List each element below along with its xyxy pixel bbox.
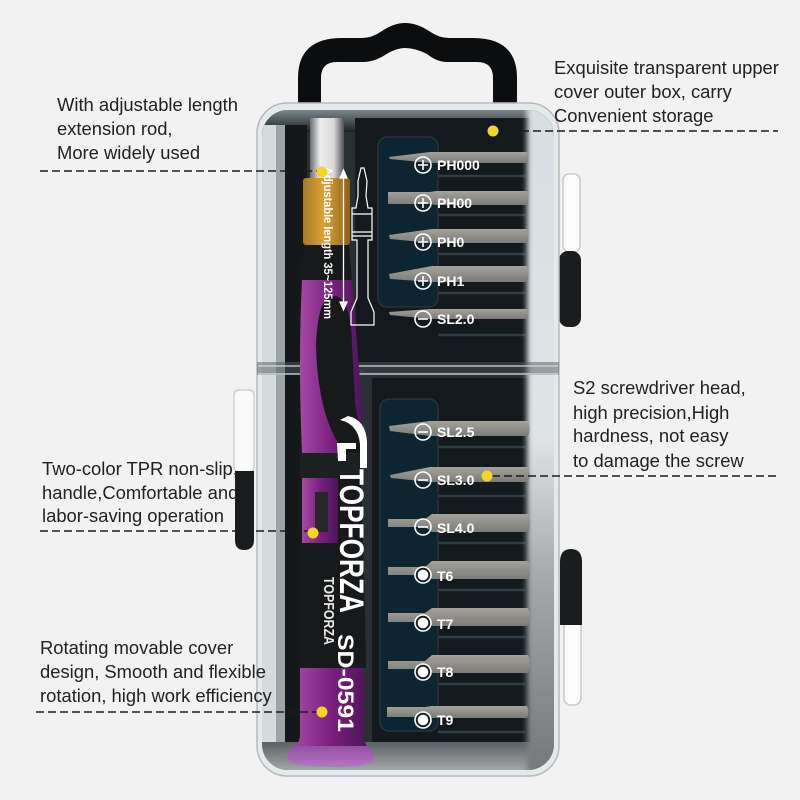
panel: screwdriver bits lower xyxy=(387,421,530,718)
callout: adjustable length: With adjustable length xyxy=(57,94,238,115)
bit labels: T7 xyxy=(437,616,454,632)
callout: S2 head xyxy=(482,377,778,482)
callout: adjustable length: extension rod, xyxy=(57,118,173,139)
bit labels: PH00 xyxy=(437,195,472,211)
callout: S2 head: hardness, not easy xyxy=(573,425,729,446)
icon: box carry handle xyxy=(298,23,517,106)
bit labels: PH1 xyxy=(437,273,464,289)
bit labels: T8 xyxy=(437,664,454,680)
callout: TPR handle: Two-color TPR non-slip, xyxy=(42,458,238,479)
bit labels: T6 xyxy=(437,568,454,584)
callout: rotating cover: Rotating movable cover xyxy=(40,637,233,658)
icon: mini screwdriver outline xyxy=(351,168,374,325)
icon: right lower clip xyxy=(560,549,582,705)
callout: rotating cover: design, Smooth and flexible xyxy=(40,661,266,682)
brand logo: TOPFORZA xyxy=(332,469,369,613)
tray lower xyxy=(372,378,530,742)
bit pocket lower xyxy=(380,399,438,731)
left glare of case xyxy=(262,125,276,765)
gold knurled sleeve xyxy=(303,178,350,245)
callout: S2 head: to damage the screw xyxy=(573,450,744,471)
callout: transparent cover: Exquisite transparent upper xyxy=(554,57,779,78)
tray upper xyxy=(355,118,530,372)
model number: SD-0591 xyxy=(333,634,358,732)
bit labels: SL2.5 xyxy=(437,424,475,440)
case bottom reflection xyxy=(262,742,554,770)
brand logo small: TOPFORZA xyxy=(321,577,337,645)
purple middle xyxy=(302,478,338,543)
callout: S2 head: high precision,High xyxy=(573,402,729,423)
bit labels: SL3.0 xyxy=(437,472,475,488)
brand logo swoosh xyxy=(337,416,367,468)
case top reflection xyxy=(262,110,554,132)
callout: adjustable length: More widely used xyxy=(57,142,200,163)
bit labels: SL4.0 xyxy=(437,520,475,536)
callout: rotating cover: rotation, high work efficiency xyxy=(40,685,273,706)
bit labels: SL2.0 xyxy=(437,311,475,327)
panel: transparent case xyxy=(257,103,562,776)
dark handle body xyxy=(298,440,366,668)
callout: adjustable length xyxy=(40,94,328,178)
rib highlights xyxy=(438,176,525,732)
length arrow xyxy=(340,170,347,310)
callout: S2 head: S2 screwdriver head, xyxy=(573,377,746,398)
icon: right upper clip xyxy=(559,174,581,327)
bit labels xyxy=(437,157,480,728)
metal collar xyxy=(310,118,344,178)
callout: transparent cover: Convenient storage xyxy=(554,105,714,126)
callout: transparent cover: cover outer box, carry xyxy=(554,81,733,102)
length label: Adjustable length 35~125mm xyxy=(321,167,333,319)
icon: left clip xyxy=(234,390,254,550)
callout: TPR handle xyxy=(40,458,318,538)
bit labels: PH0 xyxy=(437,234,464,250)
callout: transparent cover xyxy=(488,57,779,136)
purple flange xyxy=(287,746,374,767)
panel: screwdriver bits upper xyxy=(388,152,528,319)
purple bottom xyxy=(294,668,368,748)
bit pocket upper xyxy=(378,137,438,307)
callout: TPR handle: handle,Comfortable and xyxy=(42,482,238,503)
black band xyxy=(300,453,362,478)
bit labels: PH000 xyxy=(437,157,480,173)
black grip insert xyxy=(316,296,364,453)
purple upper handle xyxy=(300,280,364,453)
panel: screwdriver xyxy=(287,118,374,767)
callout: TPR handle: labor-saving operation xyxy=(42,505,224,526)
neck xyxy=(298,245,352,282)
callout: rotating cover xyxy=(36,637,328,718)
case hinge line xyxy=(257,362,559,375)
icon: bit type symbols xyxy=(415,157,431,728)
right glare of case xyxy=(527,105,562,775)
bit labels: T9 xyxy=(437,712,454,728)
